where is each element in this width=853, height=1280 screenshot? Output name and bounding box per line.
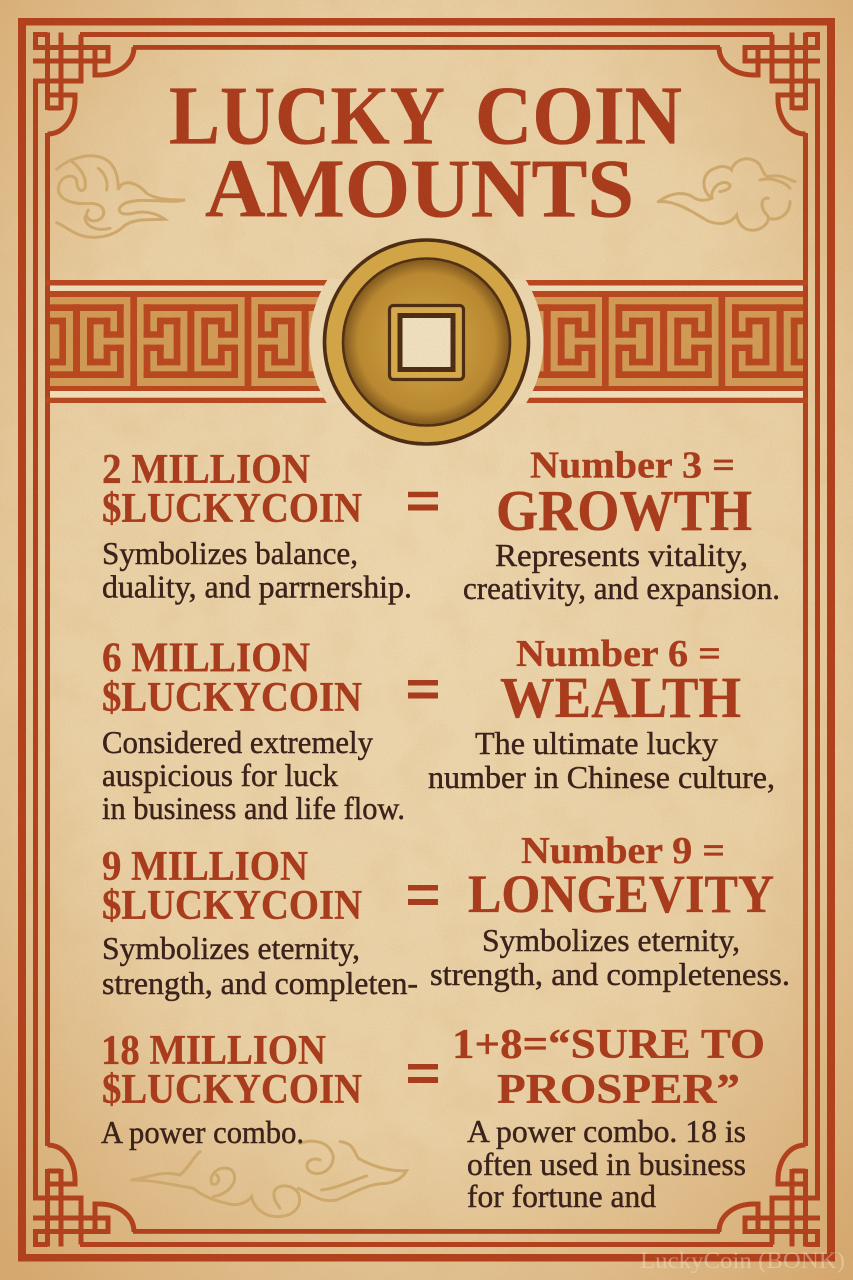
amount heading: 6 MILLION: [102, 636, 310, 682]
corner knot: bottom right: [719, 1145, 820, 1246]
amount description: Considered extremely: [102, 724, 373, 760]
amount heading: $LUCKYCOIN: [102, 675, 362, 721]
row: 2 million: [102, 444, 780, 606]
corner knot: top right: [719, 32, 820, 134]
title: LUCKY: [169, 69, 445, 162]
meaning description: [428, 725, 775, 795]
meaning heading: Number 9 =: [521, 830, 725, 872]
meaning description: [463, 537, 780, 606]
amount description: [102, 535, 412, 604]
amount description: [102, 724, 405, 826]
meaning description: Symbolizes eternity,: [482, 922, 740, 958]
meaning heading: [500, 633, 741, 730]
meaning description: Represents vitality,: [495, 537, 748, 573]
meaning description: The ultimate lucky: [475, 725, 718, 761]
title: AMOUNTS: [205, 142, 634, 236]
corner knot: bottom left: [33, 1145, 134, 1246]
meaning heading: [496, 444, 752, 543]
amount heading: [102, 447, 362, 532]
title: COIN: [475, 69, 682, 162]
amount description: strength, and completen-: [102, 965, 418, 1001]
meaning description: number in Chinese culture,: [428, 759, 775, 795]
row: 6 million: [102, 633, 775, 826]
amount description: A power combo.: [101, 1114, 304, 1150]
meaning description: often used in business: [467, 1146, 746, 1182]
meaning heading: [452, 1022, 765, 1113]
meaning heading: [468, 830, 774, 924]
meaning description: [430, 922, 790, 992]
amount description: in business and life flow.: [102, 790, 405, 826]
meaning description: for fortune and: [467, 1178, 656, 1214]
meaning description: [467, 1113, 746, 1214]
amount description: auspicious for luck: [102, 757, 338, 793]
amount heading: $LUCKYCOIN: [102, 883, 362, 929]
equals sign: [408, 680, 438, 698]
icon: cloud bottom: [132, 1141, 407, 1217]
meaning description: A power combo. 18 is: [467, 1113, 746, 1149]
equals sign: [408, 1064, 438, 1083]
corner knot: top left: [33, 32, 134, 134]
meaning heading: GROWTH: [496, 478, 752, 543]
meaning heading: 1+8=“SURE TO: [452, 1022, 765, 1068]
icon: cloud top left: [57, 156, 185, 237]
amount heading: 2 MILLION: [102, 447, 310, 493]
meaning heading: PROSPER”: [497, 1067, 740, 1113]
icon: cloud top right: [658, 159, 795, 230]
equals sign: [408, 492, 438, 510]
watermark: LuckyCoin (BONK): [640, 1248, 845, 1273]
equals sign: [408, 885, 438, 905]
icon: coin: [310, 238, 544, 446]
amount description: Symbolizes eternity,: [102, 930, 360, 966]
meaning heading: LONGEVITY: [468, 864, 774, 924]
amount description: duality, and parrnership.: [102, 568, 412, 604]
amount heading: 18 MILLION: [101, 1028, 326, 1074]
meaning description: strength, and completeness.: [430, 956, 790, 992]
meaning heading: WEALTH: [500, 665, 741, 730]
meaning description: creativity, and expansion.: [463, 570, 780, 606]
title: [169, 69, 682, 236]
amount heading: $LUCKYCOIN: [102, 1067, 362, 1113]
amount heading: [102, 636, 362, 721]
meaning heading: Number 6 =: [516, 633, 721, 675]
amount heading: $LUCKYCOIN: [102, 486, 362, 532]
amount description: Symbolizes balance,: [102, 535, 358, 571]
meander band: [23, 280, 835, 403]
amount heading: 9 MILLION: [102, 844, 308, 890]
amount heading: [102, 844, 362, 929]
meaning heading: Number 3 =: [530, 444, 735, 486]
amount description: [102, 930, 418, 1001]
row: 18 million: [101, 1022, 765, 1214]
amount heading: [101, 1028, 362, 1113]
row: 9 million: [102, 830, 790, 1001]
